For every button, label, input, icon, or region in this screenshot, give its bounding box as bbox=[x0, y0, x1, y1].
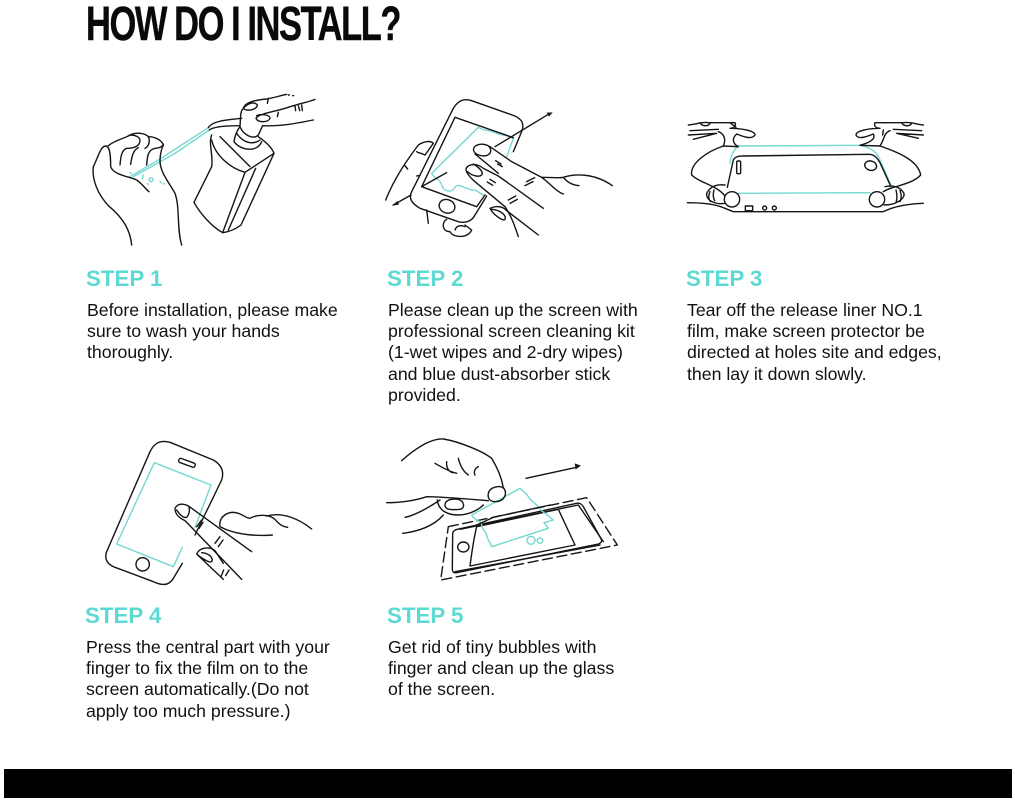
step 3 heading: STEP 3 bbox=[686, 266, 762, 291]
icon: washing hands with soap pump bbox=[92, 94, 316, 246]
step 5 heading: STEP 5 bbox=[387, 603, 463, 628]
icon: removing bubbles with a sticker bbox=[386, 438, 618, 580]
icon: laying down the protector with both hands bbox=[686, 122, 924, 212]
step 4 heading: STEP 4 bbox=[85, 603, 161, 628]
step 2 text: (1-wet wipes and 2-dry wipes) bbox=[388, 342, 623, 362]
step 5 text: Get rid of tiny bubbles with bbox=[388, 637, 596, 657]
step 2 text bbox=[388, 300, 638, 405]
step 3 text: film, make screen protector be bbox=[687, 321, 925, 341]
icon: cleaning the screen with two fingers bbox=[385, 99, 613, 238]
step 2 text: and blue dust-absorber stick bbox=[388, 364, 610, 384]
step 2 text: provided. bbox=[388, 385, 461, 405]
step 1 heading: STEP 1 bbox=[86, 266, 162, 291]
step 3 text: Tear off the release liner NO.1 bbox=[687, 300, 923, 320]
step 1 text: sure to wash your hands bbox=[87, 321, 280, 341]
step 2 heading: STEP 2 bbox=[387, 266, 463, 291]
step 2 text: Please clean up the screen with bbox=[388, 300, 638, 320]
step 4 text: Press the central part with your bbox=[86, 637, 330, 657]
step 5 text bbox=[388, 637, 614, 699]
footer bar bbox=[4, 769, 1012, 798]
step 1 text: thoroughly. bbox=[87, 342, 173, 362]
step 4 text: apply too much pressure.) bbox=[86, 701, 290, 721]
step 1 text: Before installation, please make bbox=[87, 300, 338, 320]
step 1 text bbox=[87, 300, 338, 362]
step 3 text: then lay it down slowly. bbox=[687, 364, 867, 384]
step 3 text bbox=[687, 300, 942, 384]
step 3 text: directed at holes site and edges, bbox=[687, 342, 942, 362]
step 5 text: finger and clean up the glass bbox=[388, 658, 614, 678]
step 5 text: of the screen. bbox=[388, 679, 495, 699]
step 2 text: professional screen cleaning kit bbox=[388, 321, 635, 341]
step 4 text: screen automatically.(Do not bbox=[86, 679, 309, 699]
step 4 text: finger to fix the film on to the bbox=[86, 658, 308, 678]
step 4 text bbox=[86, 637, 330, 721]
icon: pressing the centre of the film bbox=[105, 440, 312, 586]
